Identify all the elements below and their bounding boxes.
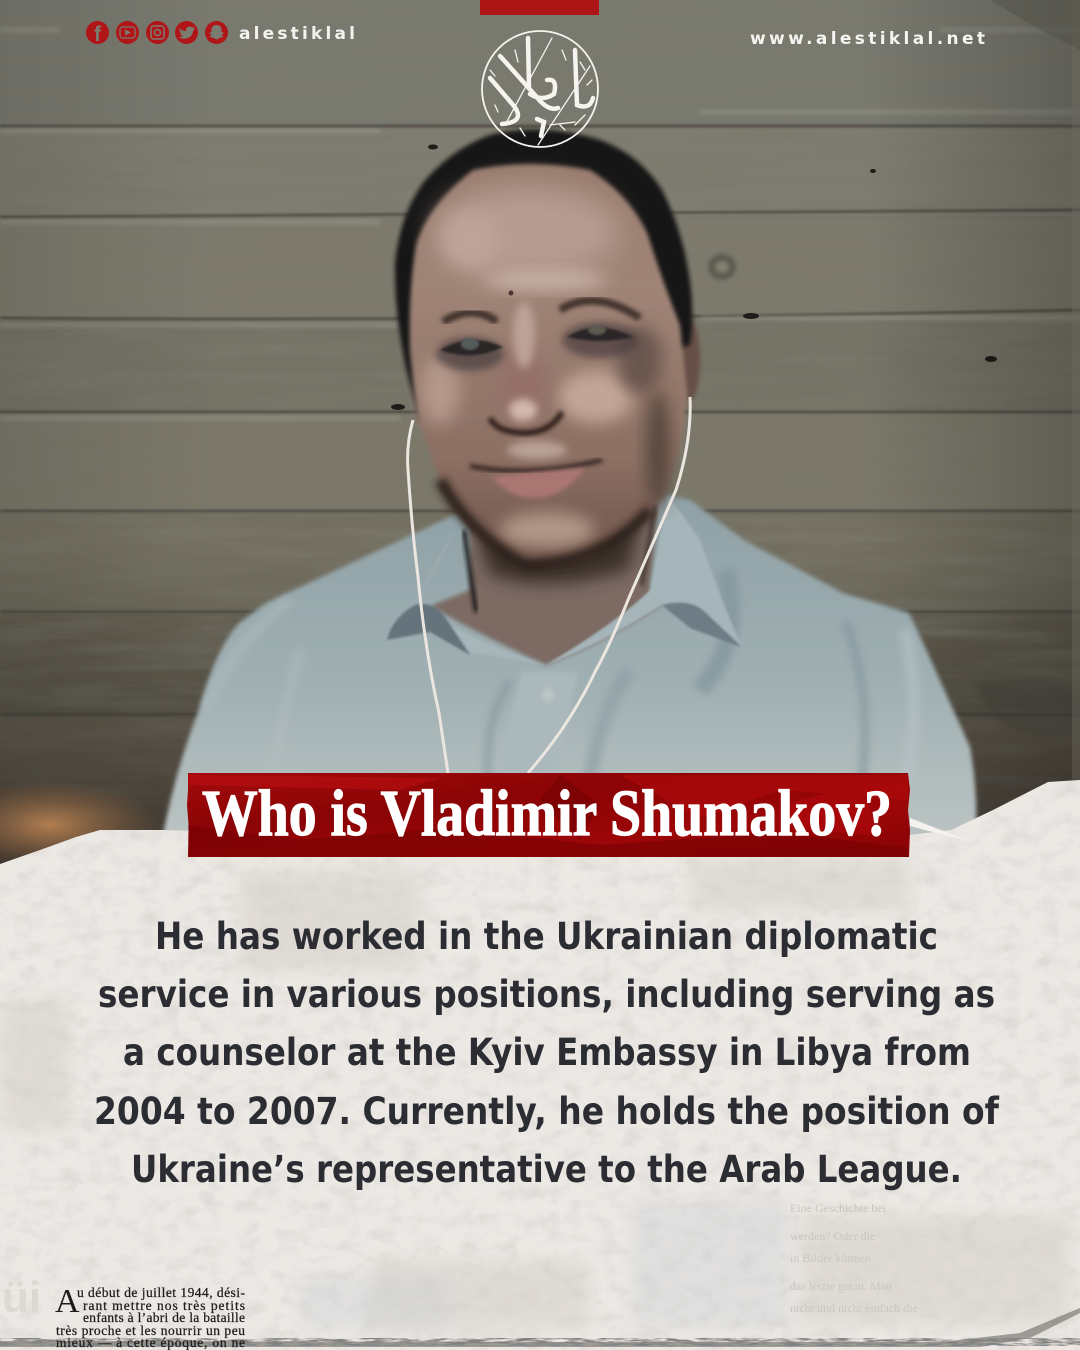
- top red tab: [480, 0, 599, 15]
- body paragraph: [94, 915, 1000, 1191]
- ear: [680, 320, 700, 400]
- icon: facebook: f: [94, 23, 102, 46]
- body paragraph: Ukraine’s representative to the Arab League.: [131, 1148, 962, 1191]
- icon: instagram: [146, 21, 169, 44]
- torn paper panel with collage texture: [0, 780, 1080, 1350]
- faint collage text: das letzte getan. Man: [790, 1279, 892, 1293]
- title banner: [187, 773, 910, 857]
- icon row: social media: [86, 21, 355, 46]
- faint collage text: Eine Geschichte bei: [790, 1201, 887, 1215]
- newspaper clipping text: [55, 1283, 246, 1350]
- eye sockets: [436, 337, 504, 371]
- faint collage text: [790, 1201, 918, 1315]
- icon: snapchat: [205, 21, 228, 44]
- eyes: [440, 340, 503, 355]
- faint collage text: in Bilder können: [790, 1251, 871, 1265]
- white tear strokes: [910, 818, 972, 842]
- newspaper clipping text: u début de juillet 1944, dési-: [77, 1285, 246, 1300]
- brows: [443, 312, 497, 322]
- body paragraph: a counselor at the Kyiv Embassy in Libya from: [123, 1031, 971, 1074]
- shirt: [162, 495, 976, 840]
- logo: circular calligraphic emblem: [482, 31, 598, 147]
- photo: man with earphones: [162, 130, 976, 840]
- newspaper clipping text: enfants à l’abri de la bataille: [83, 1310, 245, 1325]
- newspaper clipping text: très proche et les nourrir un peu: [56, 1323, 245, 1338]
- handle: alestiklal: [239, 24, 355, 44]
- icon: facebook: [86, 21, 109, 46]
- nose: [490, 412, 562, 433]
- body paragraph: He has worked in the Ukrainian diplomatic: [155, 915, 938, 958]
- neck: [430, 490, 662, 665]
- photo: wooden plank wall background: [0, 0, 1080, 887]
- facial shading: [435, 186, 619, 278]
- title text: Who is Vladimir Shumakov?: [202, 777, 892, 850]
- hair: [395, 130, 692, 420]
- newspaper clipping text: rant mettre nos très petits: [83, 1298, 245, 1313]
- placket and button: [497, 672, 578, 775]
- earphone cables: [408, 397, 690, 773]
- torn paper panel with collage texture: üi: [2, 1273, 41, 1322]
- face: [410, 164, 687, 565]
- collar: [415, 518, 546, 665]
- website url: www.alestiklal.net: [750, 29, 985, 49]
- icon: youtube: [116, 21, 139, 44]
- newspaper clipping text: A: [55, 1283, 80, 1320]
- faint collage text: werden? Oder die: [790, 1229, 875, 1243]
- newspaper clipping text: mieux — à cette époque, on ne: [56, 1335, 245, 1350]
- faint collage text: nicht und nicht einfach die: [790, 1301, 918, 1315]
- mouth: [470, 460, 602, 471]
- icon: twitter: [175, 21, 198, 44]
